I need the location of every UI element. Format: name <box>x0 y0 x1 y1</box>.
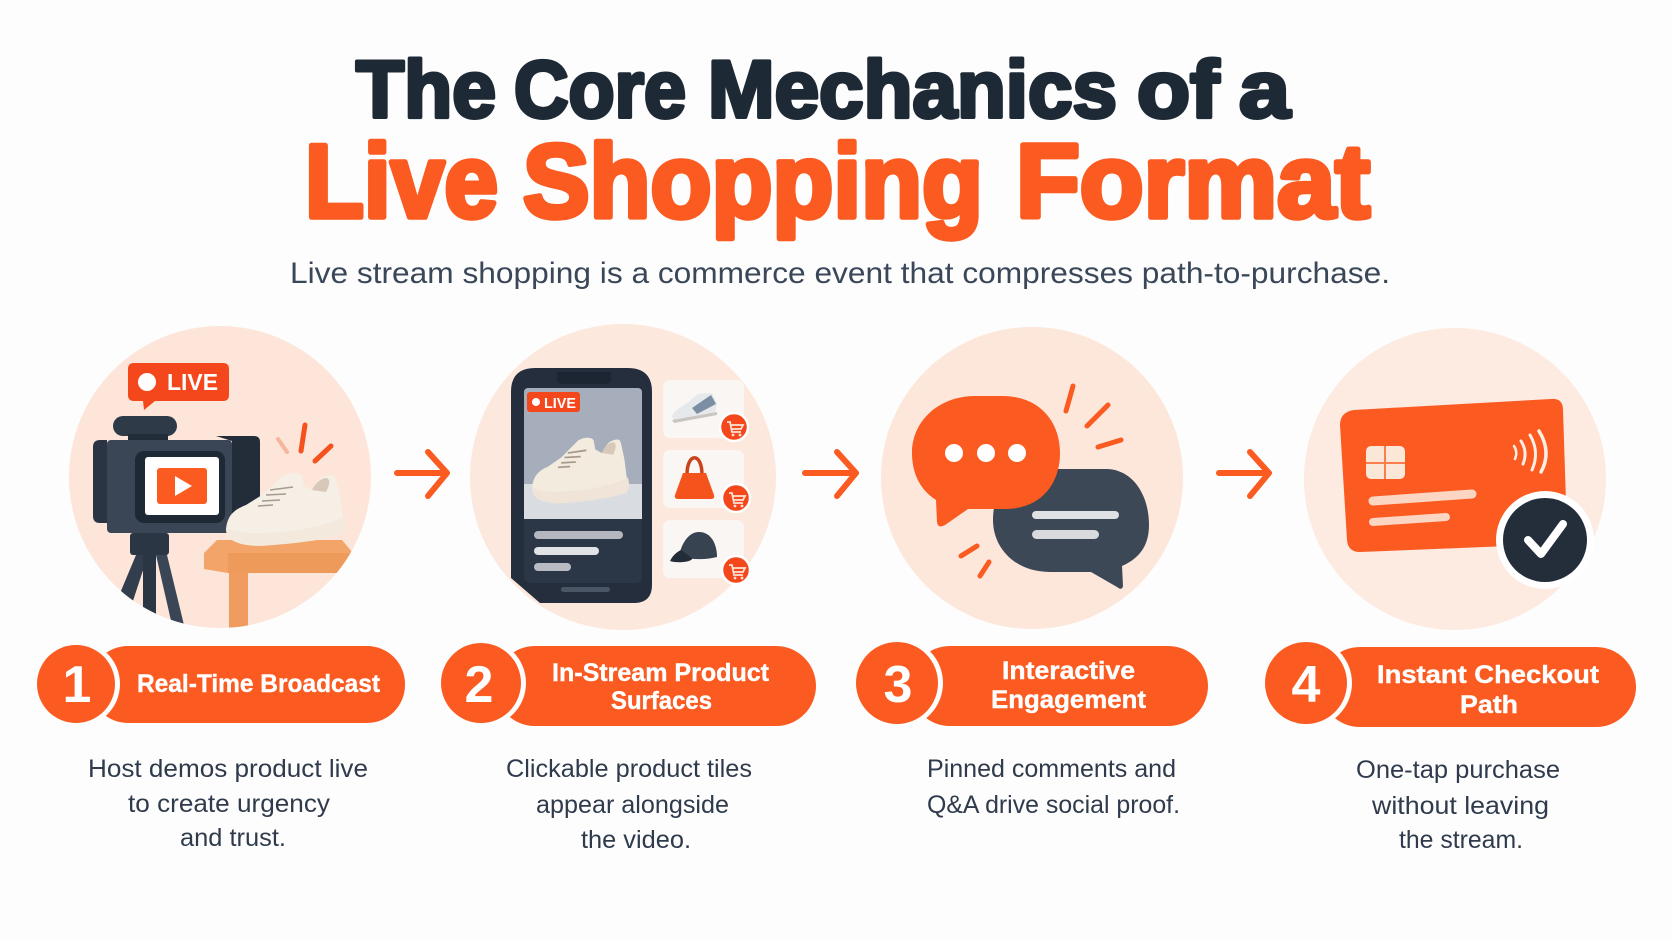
icon: sparkle lines <box>278 425 331 461</box>
step 1 heading pill: Real-Time Broadcast <box>137 670 381 698</box>
icon: orange chat bubble <box>912 396 1060 526</box>
panel: step 1 illustration, camera and shoe <box>69 326 371 628</box>
icon: phone live badge <box>527 392 580 412</box>
step 4 description: the stream. <box>1399 826 1523 854</box>
panel: step 2 illustration, phone and product tiles <box>470 324 776 630</box>
step 4 description: One-tap purchase <box>1356 756 1560 784</box>
step 1 description: Host demos product live <box>88 755 368 783</box>
icon: sneaker <box>226 473 346 546</box>
panel: step 3 illustration, chat bubbles <box>881 327 1183 629</box>
step 4 description <box>1356 756 1560 854</box>
product tile: handbag <box>663 450 750 512</box>
step 4 heading pill <box>1262 638 1636 728</box>
step 2 description: appear alongside <box>536 791 729 819</box>
title: Live <box>305 124 498 240</box>
title: Format <box>1016 124 1370 240</box>
product tile: shoe <box>663 380 748 441</box>
title <box>305 45 1370 240</box>
icon: phone live badge: LIVE <box>544 395 576 412</box>
step 4 heading pill: Path <box>1460 691 1518 719</box>
step 1 heading pill: 1 <box>63 656 91 714</box>
step 2 description: the video. <box>581 826 691 854</box>
step 4 heading pill: 4 <box>1292 656 1321 714</box>
product tile: cap <box>663 520 750 584</box>
title: The <box>356 45 496 135</box>
icon: live badge: LIVE <box>167 369 218 395</box>
icon: contactless waves <box>1514 431 1546 472</box>
step 2 heading pill: 2 <box>465 656 493 714</box>
step 3 heading pill: 3 <box>884 656 912 714</box>
title: of <box>1137 45 1220 135</box>
step 3 heading pill: Engagement <box>991 686 1147 714</box>
step 2 heading pill: In-Stream Product <box>552 659 770 687</box>
step 2 heading pill <box>438 639 816 727</box>
step 4 heading pill: Instant Checkout <box>1377 661 1600 689</box>
icon: tripod <box>118 533 184 625</box>
step 1 heading pill <box>34 641 405 727</box>
step 4 description: without leaving <box>1371 792 1549 820</box>
step 3 heading pill <box>853 638 1208 728</box>
arrow 3 <box>1219 452 1269 496</box>
arrow 2 <box>805 452 856 496</box>
icon: credit card <box>1340 399 1567 552</box>
step 3 description <box>927 755 1180 819</box>
icon: video camera <box>93 416 260 533</box>
title: Core <box>514 45 686 135</box>
icon: dark chat bubble <box>993 469 1149 589</box>
step 3 description: Pinned comments and <box>927 755 1176 783</box>
step 2 heading pill: Surfaces <box>611 687 712 715</box>
icon: check badge <box>1496 491 1594 589</box>
icon: smartphone <box>511 368 652 603</box>
icon: live badge <box>128 363 229 410</box>
step 1 description <box>88 755 368 852</box>
panel: step 4 illustration, payment card <box>1304 328 1606 630</box>
icon: sneaker on screen <box>532 438 629 503</box>
step 2 description: Clickable product tiles <box>506 755 752 783</box>
step 1 description: to create urgency <box>128 790 331 818</box>
icon: sparkle lines <box>961 386 1121 576</box>
arrow 1 <box>397 452 447 496</box>
step 2 description <box>506 755 752 854</box>
step 3 description: Q&A drive social proof. <box>927 791 1180 819</box>
title: Mechanics <box>708 45 1117 135</box>
title: a <box>1239 45 1291 135</box>
icon: card chip <box>1366 446 1405 479</box>
subtitle: Live stream shopping is a commerce event that compresses path-to-purchase. <box>290 257 1390 290</box>
step 3 heading pill: Interactive <box>1002 657 1135 685</box>
step 1 description: and trust. <box>180 824 286 852</box>
icon: table <box>204 540 352 628</box>
title: Shopping <box>523 124 983 240</box>
